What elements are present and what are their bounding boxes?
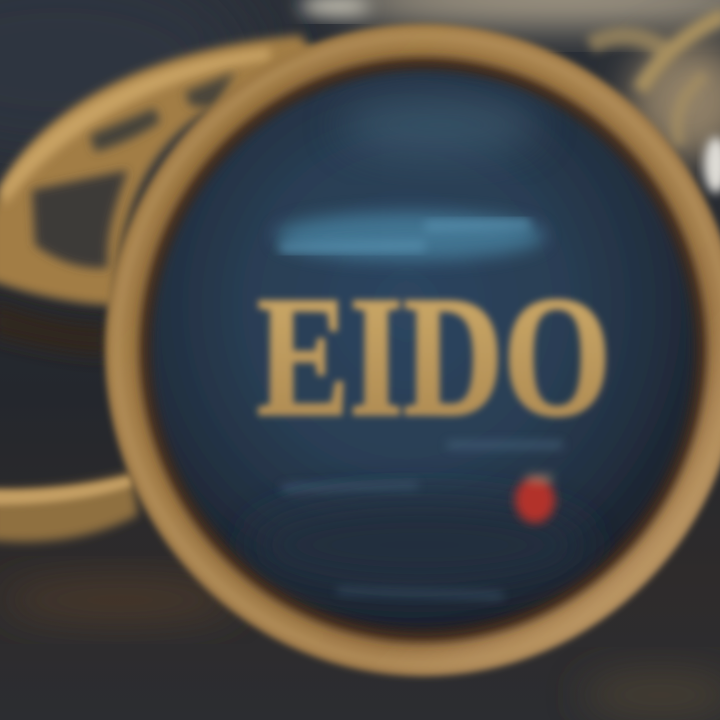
red marker dot <box>515 474 555 523</box>
upper blue glow <box>275 212 545 260</box>
lower left band <box>0 472 138 542</box>
lens outer gold frame <box>105 24 720 676</box>
left gold ring with windows <box>0 35 330 542</box>
lens glass <box>151 70 695 630</box>
lower faint lines <box>285 445 560 595</box>
ring windows <box>32 72 235 268</box>
lettering: EIDO: EIDO <box>257 262 611 452</box>
decorative chain links top right <box>590 15 720 145</box>
